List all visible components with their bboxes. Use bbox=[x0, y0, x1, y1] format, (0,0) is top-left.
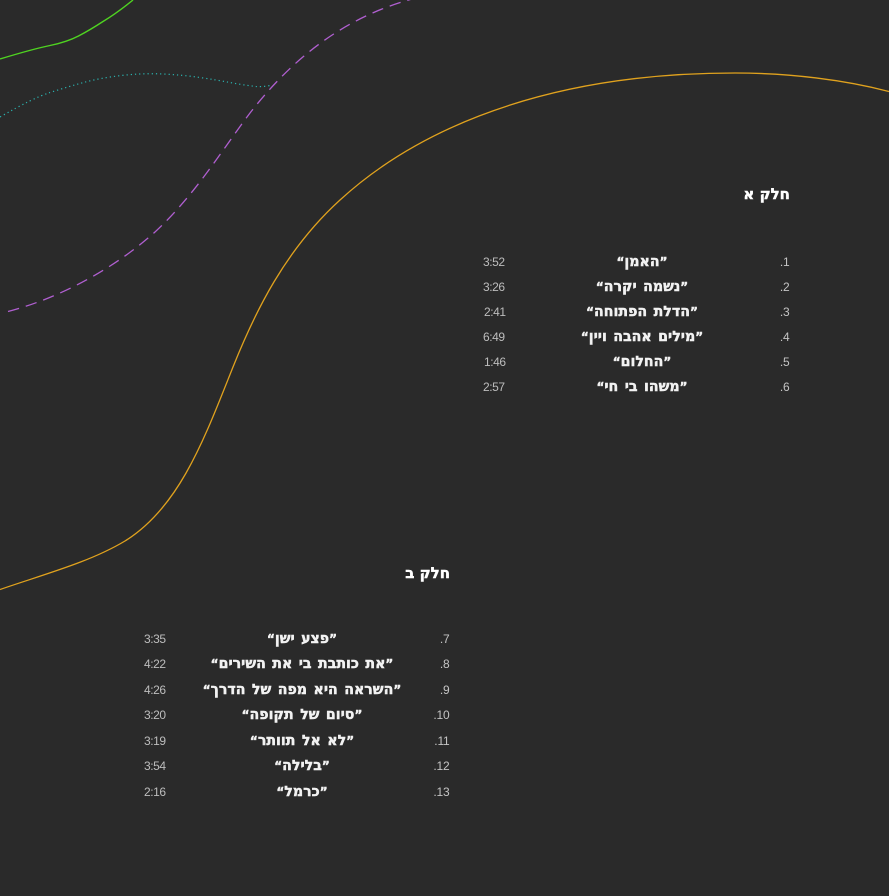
track 6: 6. bbox=[780, 380, 790, 394]
track 2: 3:26 bbox=[483, 280, 505, 294]
track 12: 3:54 bbox=[144, 759, 166, 773]
heading: part B: חלק ב bbox=[405, 564, 450, 582]
track 8: 4:22 bbox=[144, 657, 166, 671]
track 8: ”את כותבת בי את השירים“ bbox=[211, 656, 393, 672]
track list: part A bbox=[483, 254, 790, 395]
track 4: 4. bbox=[780, 330, 790, 344]
track 5: 1:46 bbox=[484, 355, 506, 369]
track 13: 13. bbox=[433, 785, 450, 799]
track 12: ”בלילה“ bbox=[274, 758, 330, 774]
track 13: 2:16 bbox=[144, 785, 166, 799]
track list: part B bbox=[144, 631, 450, 800]
track 4 bbox=[483, 329, 790, 345]
track 5 bbox=[484, 354, 790, 370]
track 7: ”פצע ישן“ bbox=[267, 631, 337, 647]
track 2 bbox=[483, 279, 790, 295]
track 6: 2:57 bbox=[483, 380, 505, 394]
purple dashed curve bbox=[8, 0, 412, 312]
track 10 bbox=[144, 707, 450, 723]
track 4: 6:49 bbox=[483, 330, 505, 344]
track 11: 11. bbox=[434, 734, 450, 748]
track 1: 3:52 bbox=[483, 255, 505, 269]
track 12 bbox=[144, 758, 450, 774]
track 3: ”הדלת הפתוחה“ bbox=[586, 304, 698, 320]
track 10: ”סיום של תקופה“ bbox=[242, 707, 362, 723]
track 5: ”החלום“ bbox=[613, 354, 671, 370]
track 2: ”נשמה יקרה“ bbox=[596, 279, 688, 295]
track 8 bbox=[144, 656, 450, 672]
track 11 bbox=[144, 733, 450, 749]
track 9: 9. bbox=[440, 683, 450, 697]
track 6: ”משהו בי חי“ bbox=[596, 379, 688, 395]
track 12: 12. bbox=[433, 759, 450, 773]
track 13 bbox=[144, 784, 450, 800]
track 9: 4:26 bbox=[144, 683, 166, 697]
track 7: 7. bbox=[440, 632, 450, 646]
track 9 bbox=[144, 682, 450, 698]
track 1: 1. bbox=[780, 255, 790, 269]
track 6 bbox=[483, 379, 790, 395]
track 7: 3:35 bbox=[144, 632, 166, 646]
track 3 bbox=[484, 304, 790, 320]
green solid curve bbox=[0, 0, 133, 59]
track 11: ”לא אל תוותר“ bbox=[250, 733, 354, 749]
track 4: ”מילים אהבה ויין“ bbox=[581, 329, 703, 345]
track 7 bbox=[144, 631, 450, 647]
track 3: 3. bbox=[780, 305, 790, 319]
gold solid curve bbox=[0, 73, 889, 590]
track 9: ”השראה היא מפה של הדרך“ bbox=[203, 682, 401, 698]
track 8: 8. bbox=[440, 657, 450, 671]
teal dotted curve bbox=[0, 74, 270, 117]
track 10: 3:20 bbox=[144, 708, 166, 722]
track 10: 10. bbox=[433, 708, 450, 722]
track 11: 3:19 bbox=[144, 734, 166, 748]
track 2: 2. bbox=[780, 280, 790, 294]
track 1 bbox=[483, 254, 790, 270]
track 1: ”האמן“ bbox=[616, 254, 668, 270]
track 5: 5. bbox=[780, 355, 790, 369]
track 3: 2:41 bbox=[484, 305, 506, 319]
track 13: ”כרמל“ bbox=[276, 784, 328, 800]
heading: part A: חלק א bbox=[743, 185, 790, 203]
